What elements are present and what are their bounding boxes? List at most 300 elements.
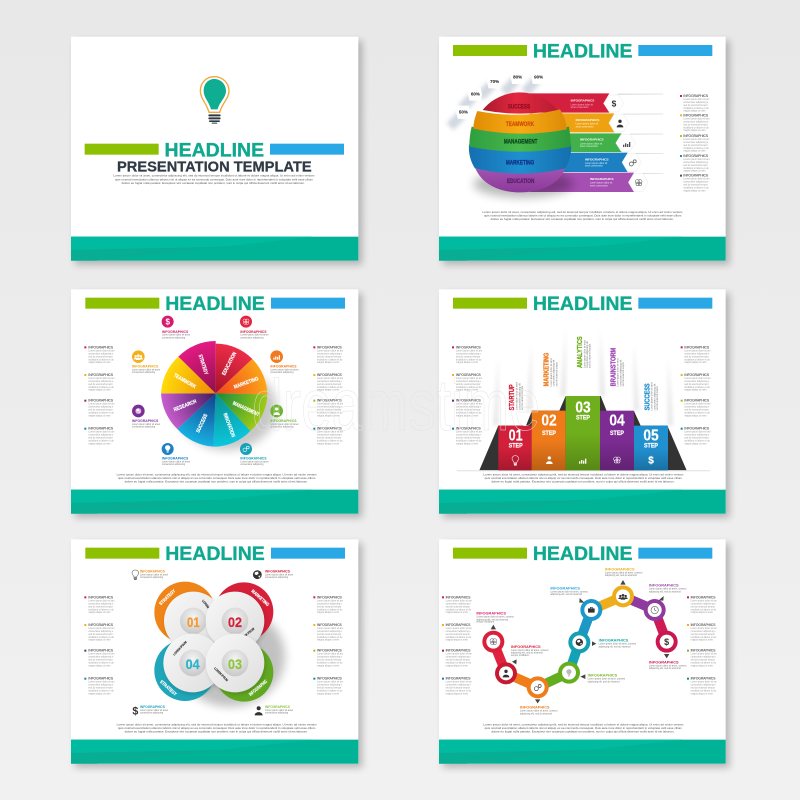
sidebar item: Lorem ipsum dolor sit am	[691, 653, 717, 656]
callout: adipiscing elit, sed do eiusmod	[520, 712, 552, 715]
sidebar item: incididunt ut labore et do	[317, 608, 343, 611]
sidebar item: consectetur adipiscing e	[456, 434, 482, 437]
sidebar item: incididunt ut labore et do	[456, 386, 482, 389]
sidebar item: consectetur adipiscing e	[683, 120, 709, 123]
callout: adipiscing elit, sed do eiusmod	[588, 680, 620, 683]
column label: marketing	[544, 353, 558, 386]
node 4	[558, 662, 580, 684]
sidebar item: INFOGRAPHICS	[684, 345, 710, 349]
callout	[476, 612, 514, 624]
icon item: chart	[270, 350, 299, 374]
description text	[113, 174, 315, 185]
sidebar item: magna aliqua ut enim	[317, 442, 339, 445]
sidebar item: Lorem ipsum dolor sit am	[88, 349, 115, 352]
icon item: dollar: INFOGRAPHICS	[162, 330, 189, 334]
callout: adipiscing elit, sed do eiusmod	[476, 618, 509, 621]
ring 01: 01	[187, 614, 200, 630]
sidebar item: sed do eiusmod tempor	[683, 184, 708, 187]
sidebar item: sed do eiusmod tempor	[446, 605, 470, 608]
sidebar item	[687, 677, 717, 695]
sidebar item: Lorem ipsum dolor sit am	[446, 653, 472, 656]
sidebar item: magna aliqua ut enim	[691, 692, 713, 695]
sidebar item	[442, 595, 472, 614]
wedge 2: MARKETING	[233, 376, 260, 391]
description text: Lorem ipsum dolor sit amet, consectetur adipiscing elit, sed do eiusmod tempor incididunt ut labore et dolore magna aliqua. Ut enim ad minim veniam	[117, 472, 317, 476]
sidebar item: sed do eiusmod tempor	[88, 355, 113, 358]
sidebar item: sed do eiusmod tempor	[317, 409, 342, 412]
step 4: STEP	[610, 430, 624, 437]
arc: teal: STRATEGY	[159, 679, 178, 697]
description text: Lorem ipsum dolor sit amet, consectetur adipiscing elit, sed do eiusmod tempor incididunt ut labore et dolore magna aliqua. Ut enim ad minim veniam	[117, 722, 317, 726]
sidebar item: incididunt ut labore et do	[88, 440, 114, 443]
sidebar item: sed do eiusmod tempor	[691, 659, 715, 662]
column label: startup: consectetur adipiscing elit	[518, 383, 521, 410]
sidebar item: INFOGRAPHICS	[88, 373, 114, 377]
node 1	[482, 631, 504, 653]
sidebar item: consectetur adipiscing e	[456, 380, 482, 383]
description text: dolore eu fugiat nulla pariatur. Excepteur sint occaecat cupidatat non proident, sunt in culpa qui officia deserunt mollit anim id est laborum.	[125, 480, 308, 484]
sidebar item: Lorem ipsum dolor sit am	[691, 627, 717, 630]
icon item: dollar	[132, 705, 168, 717]
step 5	[634, 426, 668, 470]
icon item: bulb: consectetur adipiscing	[140, 576, 164, 579]
footer band	[71, 490, 358, 514]
description text	[117, 472, 317, 484]
band: management: MANAGEMENT	[504, 139, 538, 146]
sidebar item	[680, 134, 710, 153]
sidebar item: magna aliqua ut enim	[317, 414, 339, 417]
slide panel	[71, 37, 358, 261]
column label: marketing: consectetur adipiscing elit	[553, 359, 556, 386]
sidebar item: sed do eiusmod tempor	[683, 164, 708, 167]
sidebar item: Lorem ipsum dolor sit am	[317, 627, 343, 630]
icon item: person: Lorem ipsum dolor sit amet	[270, 423, 299, 426]
callout: tempor incididunt	[511, 654, 529, 657]
slide shadow	[443, 41, 730, 265]
icon item: person	[270, 405, 299, 429]
sidebar item: magna aliqua ut enim	[684, 361, 707, 364]
sidebar item: Lorem ipsum dolor sit am	[88, 377, 115, 380]
description text: quis nostrud exercitation ullamco laboris nisi ut aliquip ex ea commodo consequat. Duis aute irure dolor in reprehenderit in voluptate velit esse cillum	[485, 726, 682, 730]
sidebar item	[681, 427, 711, 445]
sidebar item: incididunt ut labore et do	[317, 386, 343, 389]
green headline bar	[85, 144, 159, 155]
sidebar item: incididunt ut labore et do	[446, 636, 472, 639]
sidebar item: sed do eiusmod tempor	[88, 437, 113, 440]
callout: adipiscing elit, sed do eiusmod	[605, 574, 637, 577]
callout: Lorem ipsum dolor sit amet, consect	[511, 649, 549, 652]
green headline bar	[85, 548, 159, 559]
sidebar item: INFOGRAPHICS	[317, 399, 343, 403]
icon item: globe: INFOGRAPHICS	[265, 569, 291, 573]
ring 03: 03	[228, 656, 242, 672]
slide 2: sphere infographic	[439, 37, 730, 265]
sidebar item	[687, 623, 717, 642]
description text: quis nostrud exercitation ullamco laboris nisi ut aliquip ex ea commodo consequat. Duis aute irure dolor in reprehenderit in voluptate velit esse cillum	[485, 476, 682, 480]
sidebar item: Lorem ipsum dolor sit am	[88, 431, 115, 434]
description text: quis nostrud exercitation ullamco laboris nisi ut aliquip ex ea commodo consequat. Duis aute irure dolor in reprehenderit in voluptate velit esse cillum	[118, 726, 316, 730]
sidebar item: incididunt ut labore et do	[691, 636, 717, 639]
sidebar item: INFOGRAPHICS	[456, 427, 482, 431]
step 5: 05	[643, 427, 659, 444]
icon item: gears: INFOGRAPHICS	[240, 457, 267, 461]
step 3	[566, 396, 600, 470]
sidebar item: Lorem ipsum dolor sit am	[88, 653, 115, 656]
icon item: dollar	[162, 316, 190, 339]
sidebar item: INFOGRAPHICS	[683, 94, 709, 98]
icon item: gears: consectetur adipiscing	[240, 463, 264, 466]
icon item: person: consectetur adipiscing	[270, 426, 294, 429]
sidebar item: sed do eiusmod tempor	[317, 437, 342, 440]
node 8	[644, 599, 666, 621]
icon item: person: INFOGRAPHICS	[270, 419, 297, 423]
callout: adipiscing elit, sed do eiusmod	[511, 652, 543, 655]
sidebar item: magna aliqua ut enim	[691, 639, 713, 642]
sidebar item: INFOGRAPHICS	[446, 677, 471, 681]
sidebar item: INFOGRAPHICS	[683, 174, 709, 178]
ribbon: green: INFOGRAPHICS	[580, 138, 604, 142]
column label: analytics: consectetur adipiscing elit	[586, 341, 589, 368]
icon item: globe	[253, 569, 293, 579]
headline: HEADLINE	[533, 293, 632, 315]
sidebar item: INFOGRAPHICS	[446, 649, 471, 653]
green headline bar	[453, 45, 527, 56]
description text: dolore eu fugiat nulla pariatur. Excepteur sint occaecat cupidatat non proident, sunt in culpa qui officia deserunt mollit anim id est laborum.	[491, 480, 675, 484]
sidebar item: consectetur adipiscing e	[684, 434, 710, 437]
icon item: person: Lorem ipsum dolor sit amet	[265, 709, 293, 712]
interlocking rings chart	[154, 582, 273, 702]
band: education: EDUCATION	[507, 178, 535, 185]
sphere chart	[469, 92, 571, 192]
sidebar item	[680, 94, 710, 113]
column label: startup: STARTUP	[509, 384, 516, 410]
sidebar item: incididunt ut labore et do	[317, 662, 343, 665]
icon item: globe: Lorem ipsum dolor sit amet	[265, 573, 293, 576]
icon item: brain: consectetur adipiscing	[240, 336, 264, 339]
sidebar item: INFOGRAPHICS	[456, 345, 482, 349]
sidebar item: INFOGRAPHICS	[88, 649, 114, 653]
sidebar item: INFOGRAPHICS	[684, 427, 710, 431]
ring 04: 04	[186, 656, 200, 672]
sidebar item: consectetur adipiscing e	[683, 161, 709, 164]
column label: success: consectetur adipiscing elit	[653, 383, 656, 410]
sphere shadow	[473, 171, 573, 197]
sidebar item: consectetur adipiscing e	[691, 656, 716, 659]
description text: Lorem ipsum dolor sit amet, consectetur adipiscing elit, sed do eiusmod tempor incididunt ut labore et dolore magna aliqua. Ut enim ad minim veniam	[482, 210, 683, 214]
ribbon: green: Lorem ipsum dolor sit	[580, 142, 603, 145]
sidebar item: INFOGRAPHICS	[691, 595, 716, 599]
sidebar item: consectetur adipiscing e	[88, 434, 114, 437]
sidebar item: incididunt ut labore et do	[88, 636, 114, 639]
headline: HEADLINE	[165, 293, 265, 315]
icon item: dollar: INFOGRAPHICS	[140, 705, 166, 709]
ribbon: red: $	[612, 98, 617, 108]
sidebar item: magna aliqua ut enim	[456, 389, 478, 392]
icon item: gears	[240, 443, 269, 466]
sidebar item: sed do eiusmod tempor	[317, 633, 342, 636]
callout: adipiscing elit, sed do eiusmod	[550, 593, 583, 596]
column label: analytics: Lorem ipsum dolor sit amet	[583, 340, 586, 368]
callout: Lorem ipsum dolor sit amet, consect	[605, 571, 643, 574]
sidebar item: incididunt ut labore et do	[683, 167, 709, 170]
sidebar item	[84, 345, 115, 364]
icon item: bulb: Lorem ipsum dolor sit amet	[140, 573, 168, 576]
sidebar item: magna aliqua ut enim	[446, 639, 468, 642]
slide shadow	[75, 543, 362, 768]
sidebar item: Lorem ipsum dolor sit am	[684, 431, 711, 434]
sidebar item	[452, 345, 482, 364]
slide 4: stepped columns infographic	[439, 289, 730, 518]
sidebar item: sed do eiusmod tempor	[456, 383, 481, 386]
sidebar item: consectetur adipiscing e	[684, 380, 710, 383]
icon: light bulb	[200, 77, 229, 124]
column label: success: sed do eiusmod tempor	[656, 386, 659, 410]
icon item: group: consectetur adipiscing	[132, 371, 156, 374]
blue headline bar	[271, 298, 345, 309]
callout: Lorem ipsum dolor sit amet, consect	[520, 710, 558, 713]
sidebar item: consectetur adipiscing e	[88, 352, 114, 355]
sidebar item: incididunt ut labore et do	[683, 126, 709, 129]
slide panel	[71, 289, 358, 514]
sidebar item: consectetur adipiscing e	[456, 352, 482, 355]
icon item: person: INFOGRAPHICS	[265, 705, 291, 709]
wedge 8: STRATEGY	[197, 354, 209, 376]
sidebar item: incididunt ut labore et do	[684, 358, 710, 361]
sidebar item: Lorem ipsum dolor sit am	[88, 681, 115, 684]
callout	[649, 660, 687, 670]
description text: dolore eu fugiat nulla pariatur. Excepteur sint occaecat cupidatat non proident, sunt in culpa qui officia deserunt mollit anim id est laborum.	[491, 217, 674, 221]
slide 5: interlocking rings infographic	[71, 539, 362, 768]
ribbon: orange: amet consectetur	[576, 125, 594, 128]
sidebar item: sed do eiusmod tempor	[88, 687, 113, 690]
sidebar item: INFOGRAPHICS	[684, 373, 710, 377]
sidebar item: INFOGRAPHICS	[88, 595, 114, 599]
callout: INFOGRAPHICS	[588, 674, 618, 678]
sidebar item: magna aliqua ut enim	[456, 414, 478, 417]
wedge 5: SUCCESS	[195, 413, 210, 434]
sidebar item: Lorem ipsum dolor sit am	[317, 653, 343, 656]
sidebar item: Lorem ipsum dolor sit am	[317, 349, 343, 352]
callout: tempor incididunt	[476, 621, 494, 624]
icon item: group: Lorem ipsum dolor sit amet	[132, 368, 160, 371]
sidebar item: sed do eiusmod tempor	[88, 633, 113, 636]
ribbon: blue: INFOGRAPHICS	[585, 157, 609, 161]
sidebar item: consectetur adipiscing e	[683, 101, 709, 104]
sidebar item	[313, 345, 343, 364]
sidebar item: magna aliqua ut enim	[88, 414, 111, 417]
sidebar item: consectetur adipiscing e	[446, 656, 471, 659]
sidebar item: incididunt ut labore et do	[446, 662, 472, 665]
ribbon: green	[530, 133, 663, 152]
sidebar item	[442, 649, 472, 667]
sidebar item: sed do eiusmod tempor	[317, 659, 342, 662]
sidebar item: Lorem ipsum dolor sit am	[456, 403, 482, 406]
sidebar item: consectetur adipiscing e	[88, 684, 114, 687]
icon item: bulb: Lorem ipsum dolor sit amet	[162, 460, 190, 463]
sidebar item: INFOGRAPHICS	[317, 649, 343, 653]
callout: INFOGRAPHICS	[649, 584, 679, 588]
sidebar item: sed do eiusmod tempor	[446, 659, 470, 662]
callout: INFOGRAPHICS	[520, 706, 550, 710]
ring 03: LOREM IPSUM	[213, 666, 229, 682]
sidebar item: sed do eiusmod tempor	[88, 659, 113, 662]
ribbon: purple	[530, 173, 663, 192]
sidebar item: INFOGRAPHICS	[317, 677, 343, 681]
sidebar item: magna aliqua ut enim	[317, 692, 339, 695]
sidebar item: magna aliqua ut enim	[683, 150, 706, 153]
sidebar item	[84, 649, 115, 667]
sidebar item: incididunt ut labore et do	[88, 358, 114, 361]
sidebar item: consectetur adipiscing e	[317, 630, 343, 633]
ribbon: purple: amet consectetur	[590, 184, 608, 187]
sidebar item: magna aliqua ut enim	[683, 189, 706, 192]
sidebar item: magna aliqua ut enim	[456, 442, 478, 445]
sidebar item	[84, 595, 115, 614]
sidebar item: INFOGRAPHICS	[446, 595, 471, 599]
callout	[520, 706, 558, 715]
sidebar item	[313, 649, 343, 667]
sidebar item: incididunt ut labore et do	[456, 412, 482, 415]
icon item: bulb: consectetur adipiscing	[162, 463, 186, 466]
callout	[588, 674, 625, 683]
callout: INFOGRAPHICS	[476, 612, 506, 616]
sidebar item: INFOGRAPHICS	[683, 154, 709, 158]
sidebar item: incididunt ut labore et do	[691, 662, 717, 665]
sidebar item: sed do eiusmod tempor	[684, 383, 709, 386]
sidebar item	[84, 399, 115, 417]
dark base	[479, 396, 687, 470]
sidebar item: incididunt ut labore et do	[88, 690, 114, 693]
sidebar item: incididunt ut labore et do	[684, 412, 710, 415]
callout: Lorem ipsum dolor sit amet, consect	[550, 590, 588, 593]
sidebar item: magna aliqua ut enim	[88, 442, 111, 445]
column label: brainstorm	[610, 348, 625, 386]
callout: INFOGRAPHICS	[511, 645, 541, 649]
icon item: dollar: consectetur adipiscing	[140, 712, 164, 715]
icon item: globe	[132, 405, 160, 429]
node 2	[495, 662, 517, 684]
sidebar item: magna aliqua ut enim	[683, 170, 706, 173]
column label: startup	[509, 382, 524, 410]
sidebar item: consectetur adipiscing e	[317, 656, 343, 659]
sidebar item: incididunt ut labore et do	[683, 147, 709, 150]
column label: analytics: sed do eiusmod tempor	[589, 343, 592, 368]
sidebar item: incididunt ut labore et do	[88, 386, 114, 389]
sidebar item	[84, 427, 115, 445]
marker 70%: 70%	[490, 79, 499, 84]
arc: red: MARKETING	[250, 589, 271, 607]
step 2	[532, 411, 566, 470]
sidebar item: incididunt ut labore et do	[684, 386, 710, 389]
sidebar item: Lorem ipsum dolor sit am	[691, 599, 717, 602]
node 9: $	[664, 637, 669, 647]
sidebar item: INFOGRAPHICS	[684, 399, 710, 403]
wheel shadow	[177, 367, 277, 450]
sidebar item: Lorem ipsum dolor sit am	[317, 599, 343, 602]
column label: brainstorm: consectetur adipiscing elit	[619, 359, 622, 386]
sidebar item: consectetur adipiscing e	[88, 630, 114, 633]
column label: startup: Lorem ipsum dolor sit amet	[516, 382, 519, 410]
step 1: 01	[509, 427, 523, 444]
sidebar item	[452, 399, 482, 417]
arrows	[491, 580, 669, 703]
sidebar item	[680, 113, 710, 132]
description text: Lorem ipsum dolor sit amet, consectetur adipiscing elit, sed do eiusmod tempor incididunt ut labore et dolore magna aliqua. Ut enim ad minim veniam	[483, 472, 684, 476]
sidebar item: incididunt ut labore et do	[456, 440, 482, 443]
icon item: chart: INFOGRAPHICS	[270, 364, 297, 368]
slide 3: pie wheel infographic	[71, 289, 362, 518]
pie wheel chart	[161, 341, 267, 447]
sidebar item: sed do eiusmod tempor	[691, 633, 715, 636]
sidebar item: sed do eiusmod tempor	[684, 355, 709, 358]
sidebar item: sed do eiusmod tempor	[691, 605, 715, 608]
sidebar item: magna aliqua ut enim	[446, 611, 468, 614]
sidebar item: consectetur adipiscing e	[684, 406, 710, 409]
sidebar item: INFOGRAPHICS	[691, 677, 716, 681]
sidebar item: consectetur adipiscing e	[684, 352, 710, 355]
icon item: bulb: INFOGRAPHICS	[162, 457, 189, 461]
column label: success: Lorem ipsum dolor sit amet	[651, 382, 654, 410]
sidebar item	[687, 595, 717, 614]
step 3: STEP	[576, 415, 590, 422]
sidebar item: magna aliqua ut enim	[684, 389, 707, 392]
sidebar item: sed do eiusmod tempor	[317, 383, 342, 386]
sidebar item: incididunt ut labore et do	[446, 690, 472, 693]
sidebar item: magna aliqua ut enim	[88, 361, 111, 364]
sidebar item: incididunt ut labore et do	[317, 440, 343, 443]
watermark: dreamstime	[252, 366, 540, 446]
icon item: brain: Lorem ipsum dolor sit amet	[240, 334, 269, 337]
callout: adipiscing elit, sed do eiusmod	[649, 590, 681, 593]
description text	[117, 722, 317, 734]
sidebar item: consectetur adipiscing e	[88, 602, 114, 605]
sidebar item: INFOGRAPHICS	[88, 623, 114, 627]
sidebar item: INFOGRAPHICS	[691, 623, 716, 627]
icon item: bulb: INFOGRAPHICS	[140, 569, 166, 573]
sidebar item: sed do eiusmod tempor	[88, 383, 113, 386]
wedge 1: EDUCATION	[221, 351, 238, 377]
sidebar item: sed do eiusmod tempor	[456, 409, 481, 412]
sidebar item: magna aliqua ut enim	[317, 389, 339, 392]
sidebar item: INFOGRAPHICS	[691, 649, 716, 653]
step 4	[600, 411, 634, 470]
sidebar item: INFOGRAPHICS	[317, 345, 343, 349]
column label: marketing: sed do eiusmod tempor	[555, 362, 558, 386]
arc: green: INFOGRAPHIC	[248, 678, 269, 697]
column label: brainstorm: Lorem ipsum dolor sit amet	[617, 358, 620, 386]
sidebar item: magna aliqua ut enim	[684, 414, 707, 417]
description text	[483, 472, 684, 484]
column label: success: SUCCESS	[644, 383, 651, 410]
sidebar item: Lorem ipsum dolor sit am	[691, 681, 717, 684]
sidebar item	[681, 373, 711, 392]
sidebar item: incididunt ut labore et do	[691, 608, 717, 611]
ring 01: LOREM IPSUM	[201, 599, 216, 617]
sidebar item: sed do eiusmod tempor	[317, 355, 342, 358]
rings shadow	[175, 607, 285, 707]
sidebar item: magna aliqua ut enim	[691, 611, 713, 614]
icon item: bulb	[162, 443, 190, 466]
sidebar item: Lorem ipsum dolor sit am	[683, 158, 710, 161]
icon item: gears: Lorem ipsum dolor sit amet	[240, 460, 269, 463]
callout	[550, 586, 588, 596]
description text: quis nostrud exercitation ullamco laboris nisi ut aliquip ex ea commodo consequat. Duis aute irure dolor in reprehenderit in voluptate velit esse cillum	[118, 476, 316, 480]
sidebar item: INFOGRAPHICS	[683, 134, 709, 138]
sidebar item: consectetur adipiscing e	[691, 684, 716, 687]
ring 02: LOREM IPSUM	[239, 627, 256, 642]
ribbon: purple: Lorem ipsum dolor sit	[590, 182, 613, 185]
description text: Lorem ipsum dolor sit amet, consectetur adipiscing elit, sed do eiusmod tempor incididunt ut labore et dolore magna aliqua. Ut enim ad minim veniam	[113, 174, 315, 178]
